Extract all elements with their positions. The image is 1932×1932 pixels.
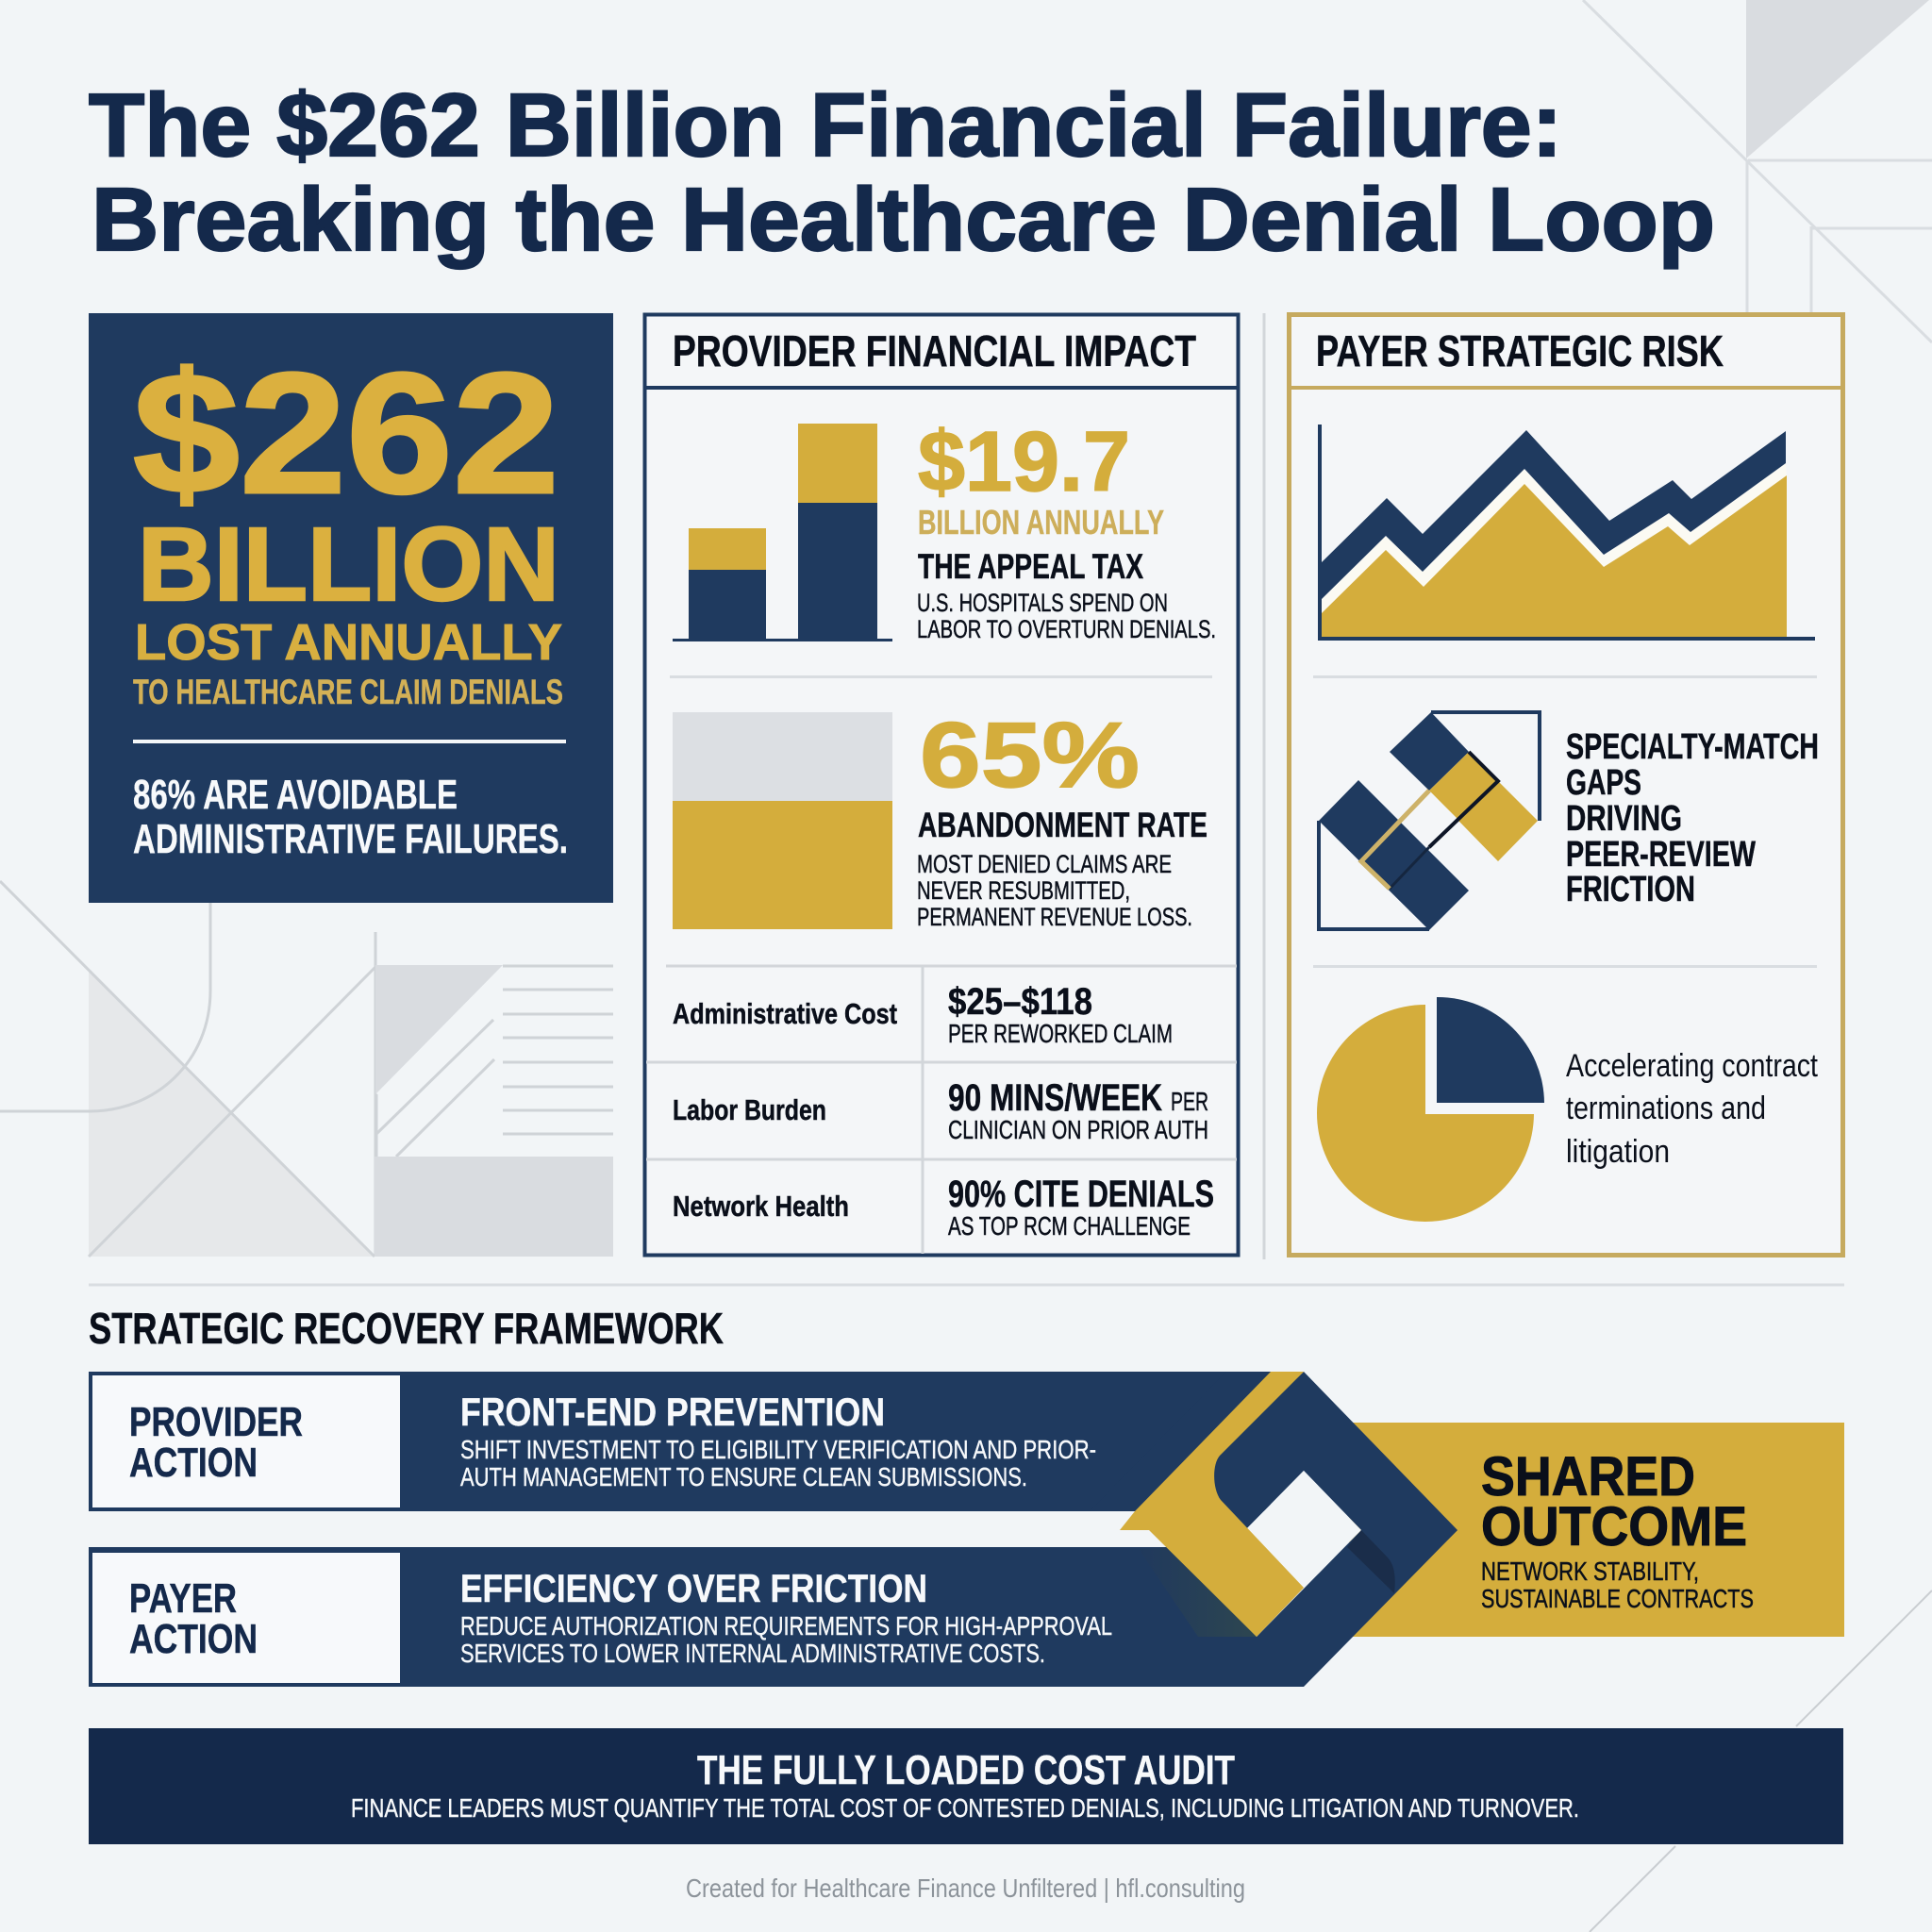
icon: specialty match interlock [1319, 712, 1540, 930]
stat: abandonment rate: 65% [920, 703, 1140, 807]
text: specialty-match gaps: FRICTION [1566, 870, 1695, 909]
table: key burden metrics: CLINICIAN ON PRIOR AUTH [948, 1115, 1208, 1144]
table: key burden metrics: $25–$118 [948, 981, 1092, 1023]
table: key burden metrics: PER REWORKED CLAIM [948, 1019, 1173, 1048]
stat: appeal tax: THE APPEAL TAX [918, 547, 1143, 586]
shared outcome panel [1349, 1423, 1844, 1637]
title: Breaking the Healthcare Denial Loop [92, 170, 1715, 270]
text: specialty-match gaps: SPECIALTY-MATCH [1566, 727, 1819, 767]
framework row: payer action [89, 1530, 1457, 1687]
text: specialty-match gaps: PEER-REVIEW [1566, 835, 1756, 874]
pie chart: contract risk [1317, 997, 1544, 1222]
panel: headline stat [89, 313, 613, 903]
text: specialty-match gaps: GAPS [1566, 763, 1641, 803]
footer credit: Created for Healthcare Finance Unfiltered | hfl.consulting [686, 1874, 1245, 1903]
payer heading: PAYER STRATEGIC RISK [1316, 326, 1724, 375]
framework row: provider action: ACTION [129, 1440, 258, 1486]
table: key burden metrics: Administrative Cost [673, 997, 897, 1030]
title: The $262 Billion Financial Failure: [89, 75, 1562, 175]
shared outcome panel: SUSTAINABLE CONTRACTS [1481, 1584, 1754, 1613]
stat: appeal tax [917, 415, 1216, 643]
framework row: payer action: SERVICES TO LOWER INTERNAL ADMINISTRATIVE COSTS. [460, 1639, 1045, 1668]
stat: appeal tax: BILLION ANNUALLY [918, 503, 1164, 541]
framework row: payer action: PAYER [129, 1575, 237, 1622]
table: key burden metrics: PER [1171, 1087, 1208, 1116]
stat: abandonment rate: MOST DENIED CLAIMS ARE [917, 850, 1172, 878]
table: key burden metrics: AS TOP RCM CHALLENGE [948, 1211, 1191, 1241]
text: contract terminations: litigation [1566, 1134, 1670, 1170]
background geometric pattern: lower left [0, 881, 613, 1257]
stat: appeal tax: U.S. HOSPITALS SPEND ON [917, 589, 1168, 617]
panel: headline stat: 86% ARE AVOIDABLE [133, 772, 458, 818]
callout: fully loaded cost audit: THE FULLY LOADED COST AUDIT [697, 1747, 1235, 1793]
panel: payer strategic risk [1289, 315, 1843, 1255]
text: specialty-match gaps [1566, 727, 1819, 909]
callout: fully loaded cost audit [89, 1728, 1843, 1844]
framework row: provider action: FRONT-END PREVENTION [460, 1390, 885, 1434]
provider heading: PROVIDER FINANCIAL IMPACT [673, 326, 1196, 375]
framework row: provider action: PROVIDER [129, 1399, 303, 1445]
panel: headline stat: $262 [133, 337, 559, 529]
shared outcome panel: NETWORK STABILITY, [1481, 1557, 1699, 1586]
shared outcome panel: SHARED [1481, 1446, 1695, 1507]
framework row: payer action: REDUCE AUTHORIZATION REQUIREMENTS FOR HIGH-APPROVAL [460, 1611, 1112, 1641]
stat: abandonment rate: PERMANENT REVENUE LOSS. [917, 903, 1192, 931]
text: contract terminations [1566, 1048, 1818, 1170]
framework row: provider action [89, 1372, 1271, 1511]
panel: headline stat: BILLION [138, 507, 559, 623]
framework row: payer action: ACTION [129, 1616, 258, 1662]
panel: headline stat: LOST ANNUALLY [135, 614, 562, 671]
table: key burden metrics: Labor Burden [673, 1093, 826, 1126]
framework row: provider action: SHIFT INVESTMENT TO ELIGIBILITY VERIFICATION AND PRIOR- [460, 1435, 1096, 1464]
shared outcome panel: OUTCOME [1481, 1496, 1747, 1557]
table: key burden metrics: 90 MINS/WEEK [948, 1077, 1162, 1119]
stat: abandonment rate: ABANDONMENT RATE [918, 806, 1208, 844]
area chart: rising risk [1320, 425, 1815, 639]
callout: fully loaded cost audit: FINANCE LEADERS MUST QUANTIFY THE TOTAL COST OF CONTESTED DENIALS, INCLUDING LITIGATION AND TURNOVER. [351, 1793, 1579, 1823]
stat: appeal tax: LABOR TO OVERTURN DENIALS. [917, 615, 1216, 643]
framework row: provider action: AUTH MANAGEMENT TO ENSURE CLEAN SUBMISSIONS. [460, 1462, 1027, 1491]
stat: abandonment rate [917, 703, 1208, 931]
panel: provider financial impact [644, 315, 1239, 1255]
stat: appeal tax: $19.7 [918, 415, 1130, 509]
panel: headline stat: TO HEALTHCARE CLAIM DENIALS [133, 673, 563, 711]
stat: abandonment rate: NEVER RESUBMITTED, [917, 876, 1130, 905]
text: specialty-match gaps: DRIVING [1566, 799, 1682, 839]
table: key burden metrics: Network Health [673, 1190, 849, 1223]
icon: interlocking loop [1120, 1372, 1457, 1637]
title [89, 75, 1715, 270]
table: key burden metrics [646, 966, 1237, 1254]
text: contract terminations: terminations and [1566, 1091, 1766, 1126]
bar chart: appeal tax [673, 424, 892, 641]
chart: abandonment block [673, 712, 892, 929]
framework row: payer action: EFFICIENCY OVER FRICTION [460, 1566, 927, 1610]
heading: strategic recovery framework: STRATEGIC RECOVERY FRAMEWORK [89, 1304, 724, 1353]
table: key burden metrics: 90% CITE DENIALS [948, 1174, 1214, 1215]
text: contract terminations: Accelerating contract [1566, 1048, 1818, 1084]
panel: headline stat: ADMINISTRATIVE FAILURES. [133, 816, 568, 862]
